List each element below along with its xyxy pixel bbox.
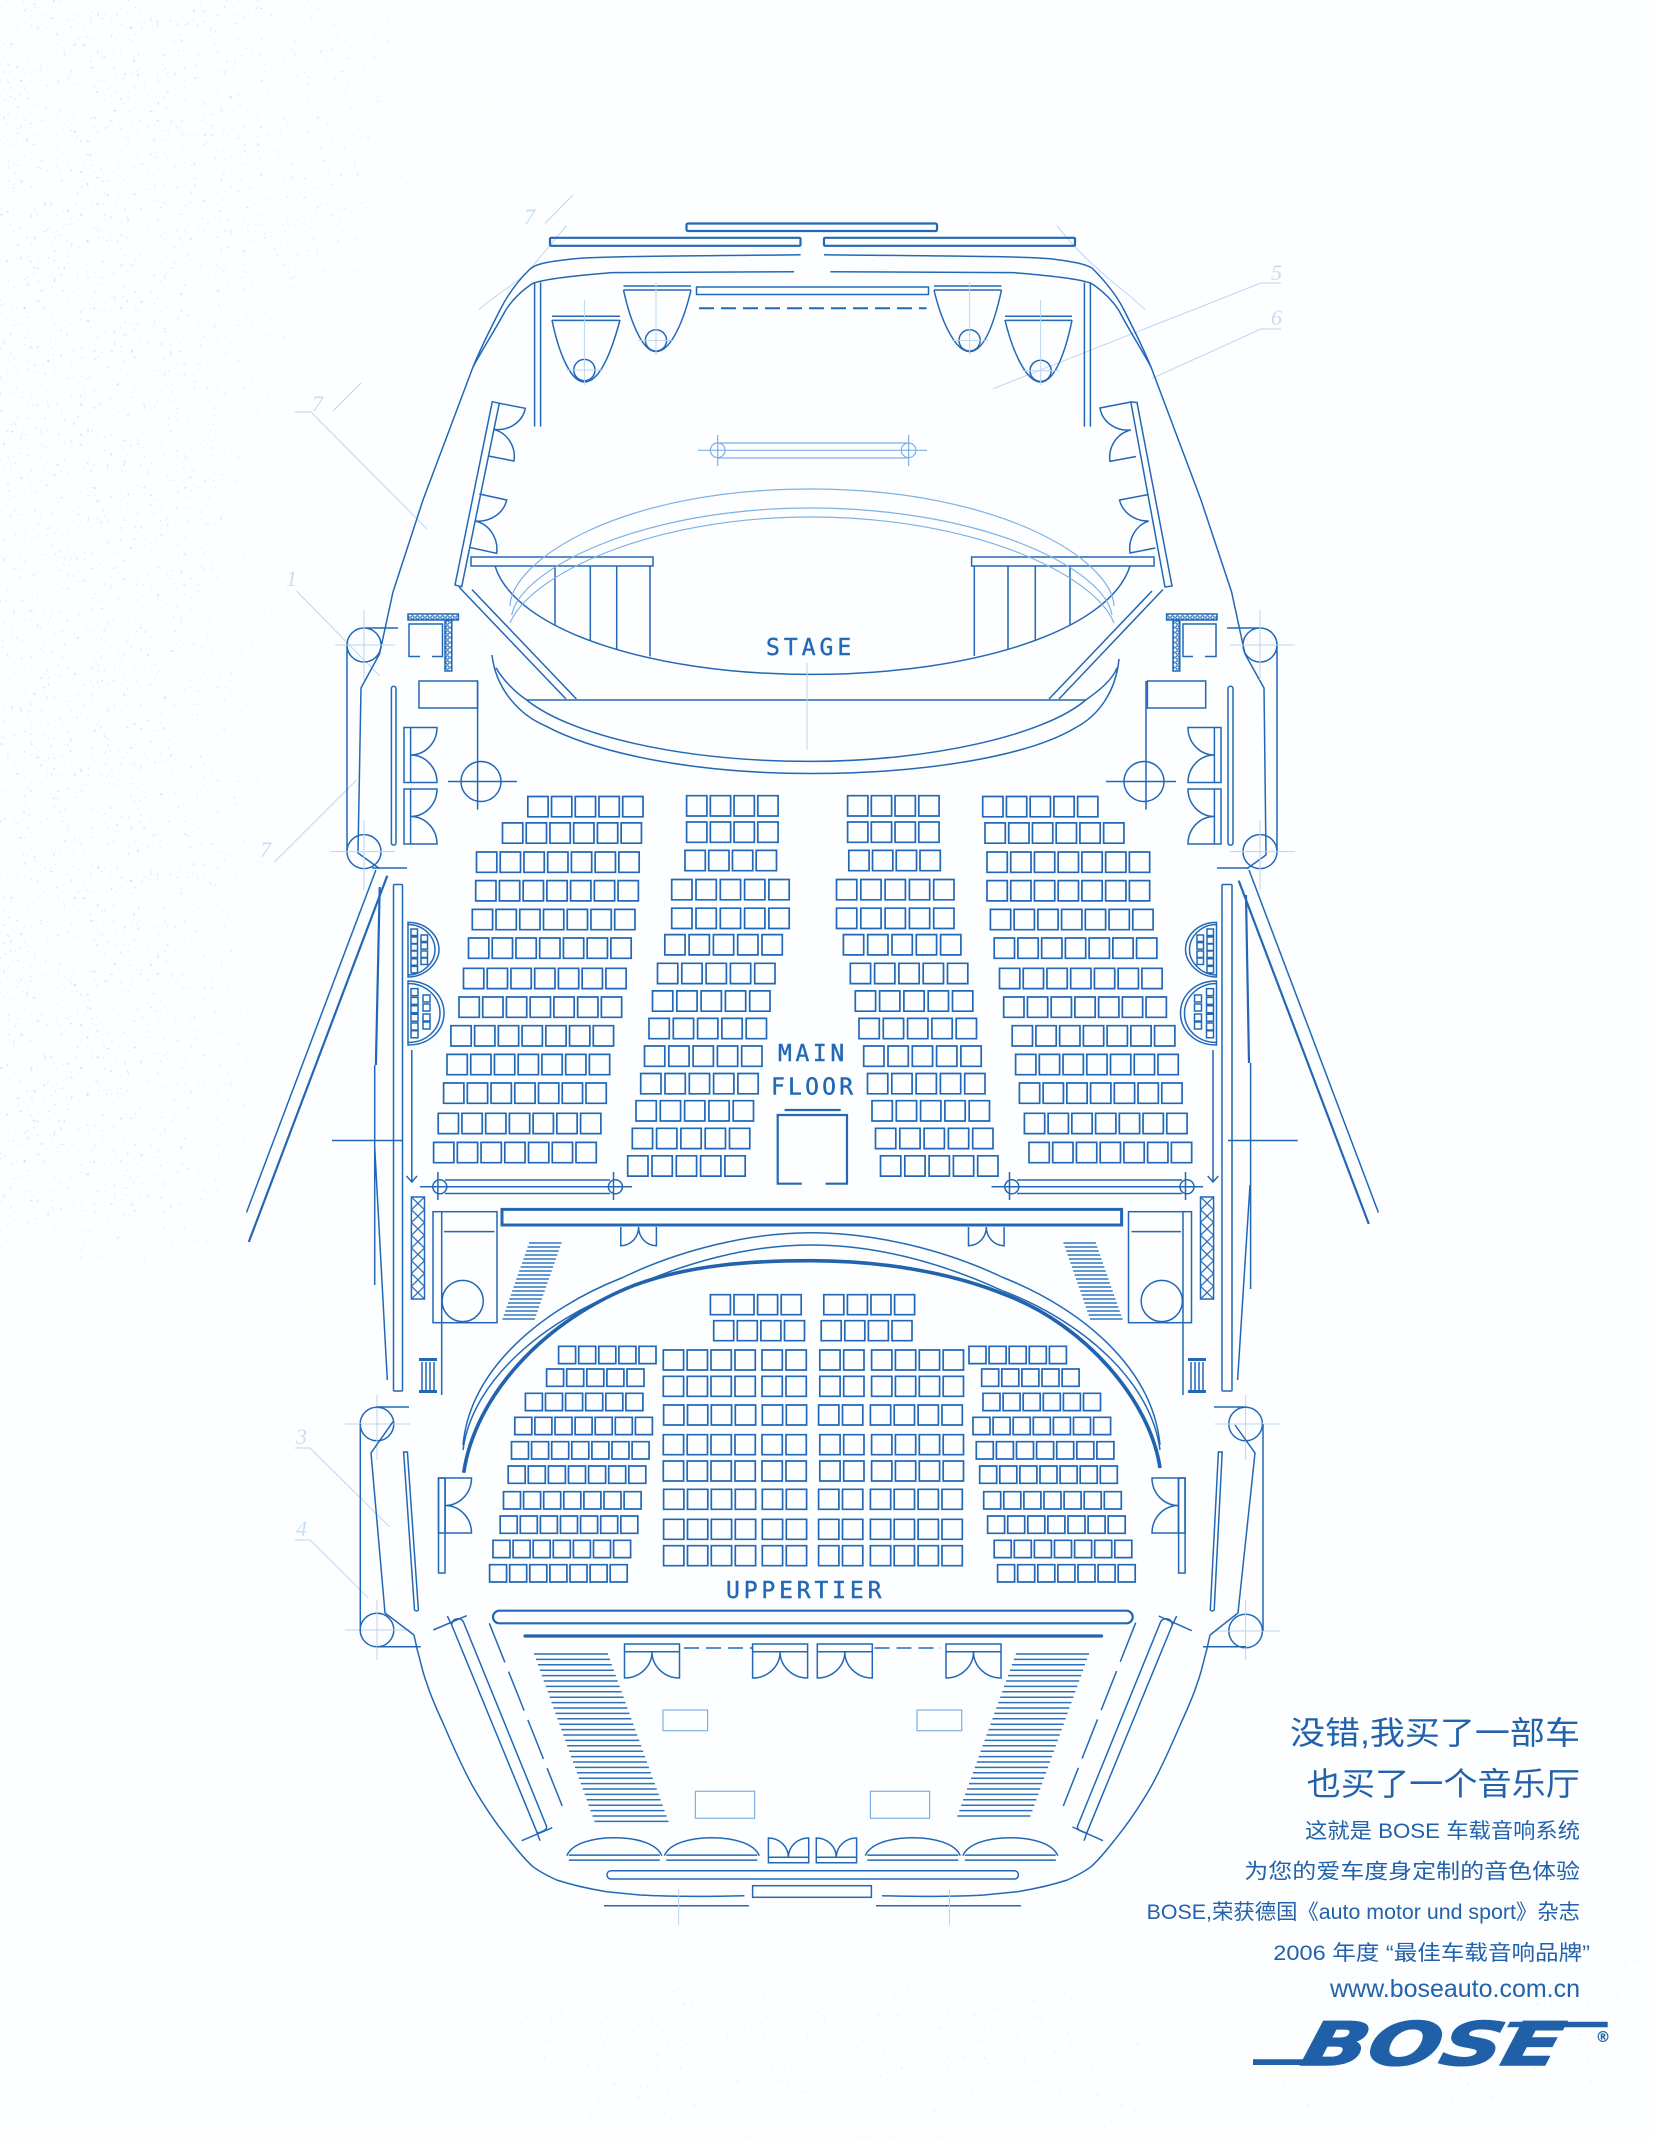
body copy: 2006 年度 “最佳车载音响品牌” — [1273, 1942, 1590, 1965]
rod on stage — [698, 435, 927, 466]
faint annotation leaders and numbers: 7 — [260, 837, 272, 862]
upper tier label: UPPERTIER — [726, 1578, 885, 1604]
faint annotation leaders and numbers: 4 — [296, 1516, 307, 1541]
rear doors and dashes — [624, 1644, 1001, 1678]
rear body curve — [414, 1635, 1210, 1925]
main floor label — [771, 1041, 856, 1101]
upper tier seats: left wing — [490, 1346, 656, 1582]
rear seats domes and doors — [567, 1838, 1058, 1897]
body copy — [1147, 1820, 1590, 2003]
faint annotation leaders and numbers — [260, 195, 1282, 1598]
rear pill and thick line — [493, 1611, 1133, 1636]
body copy: 为您的爱车度身定制的音色体验 — [1244, 1860, 1580, 1884]
car outline: upper body — [347, 255, 1277, 869]
main floor seats: far right section — [983, 796, 1192, 1163]
upper tier seats: right wing — [969, 1346, 1135, 1582]
upper tier side doors and stairs — [419, 1360, 1206, 1573]
side aisles with arrows — [332, 884, 1298, 1391]
BOSE logo — [1253, 2010, 1610, 2080]
main floor seats: centre right section — [836, 796, 998, 1176]
right side fixtures upper — [1106, 614, 1233, 845]
stage ellipse — [495, 566, 1130, 674]
mid cabinets — [433, 1212, 1192, 1395]
roof bars — [550, 224, 1075, 246]
headline: 没错,我买了一部车 — [1290, 1715, 1580, 1751]
main floor label: MAIN — [778, 1041, 848, 1067]
stage area: reflectors and rear wall — [535, 282, 1090, 427]
body copy: www.boseauto.com.cn — [1329, 1975, 1580, 2003]
faint annotation leaders and numbers: 7 — [524, 204, 536, 229]
faint annotation leaders and numbers: 6 — [1271, 305, 1282, 330]
body copy: 这就是 BOSE 车载音响系统 — [1305, 1820, 1580, 1843]
faint annotation leaders and numbers: 5 — [1271, 260, 1282, 285]
faint annotation leaders and numbers: 7 — [312, 391, 324, 416]
upper tier seats: centre block — [663, 1295, 964, 1566]
right door wing — [1238, 870, 1378, 1380]
light rectangles on rear floor — [663, 1710, 962, 1818]
upper tier arcs — [463, 1233, 1160, 1473]
diagonal hatch blocks — [502, 1243, 1123, 1319]
central beam and small doors — [502, 1209, 1122, 1246]
BOSE logo: ® — [1596, 2028, 1610, 2046]
faint annotation leaders and numbers: 1 — [286, 566, 297, 591]
cross rods — [420, 1172, 1203, 1200]
body copy: BOSE,荣获德国《auto motor und sport》杂志 — [1147, 1901, 1580, 1924]
stage front crescent — [459, 587, 1163, 774]
slanted rear pillars — [433, 1616, 1192, 1841]
main floor seats: centre left section — [628, 796, 789, 1176]
centre box — [778, 1110, 847, 1184]
stage light arcs — [510, 489, 1114, 623]
main floor seats: far left section — [434, 796, 643, 1163]
headline: 也买了一个音乐厅 — [1307, 1766, 1580, 1802]
rear stairs hatching — [534, 1654, 1089, 1821]
stage label: STAGE — [766, 635, 855, 661]
BOSE logo: BOSE — [1295, 2010, 1571, 2080]
seating pods — [408, 922, 1216, 1045]
main floor label: FLOOR — [771, 1075, 856, 1101]
headline — [1290, 1715, 1580, 1802]
wheel circles, upper — [330, 610, 1295, 890]
cross-hatched columns — [411, 1197, 1214, 1299]
stage side panels and doors — [455, 402, 1172, 587]
lower wheel circles and body sides — [345, 1395, 1280, 1660]
left side fixtures upper — [391, 614, 517, 845]
left door wing — [246, 870, 387, 1380]
faint annotation leaders and numbers: 3 — [295, 1424, 307, 1449]
